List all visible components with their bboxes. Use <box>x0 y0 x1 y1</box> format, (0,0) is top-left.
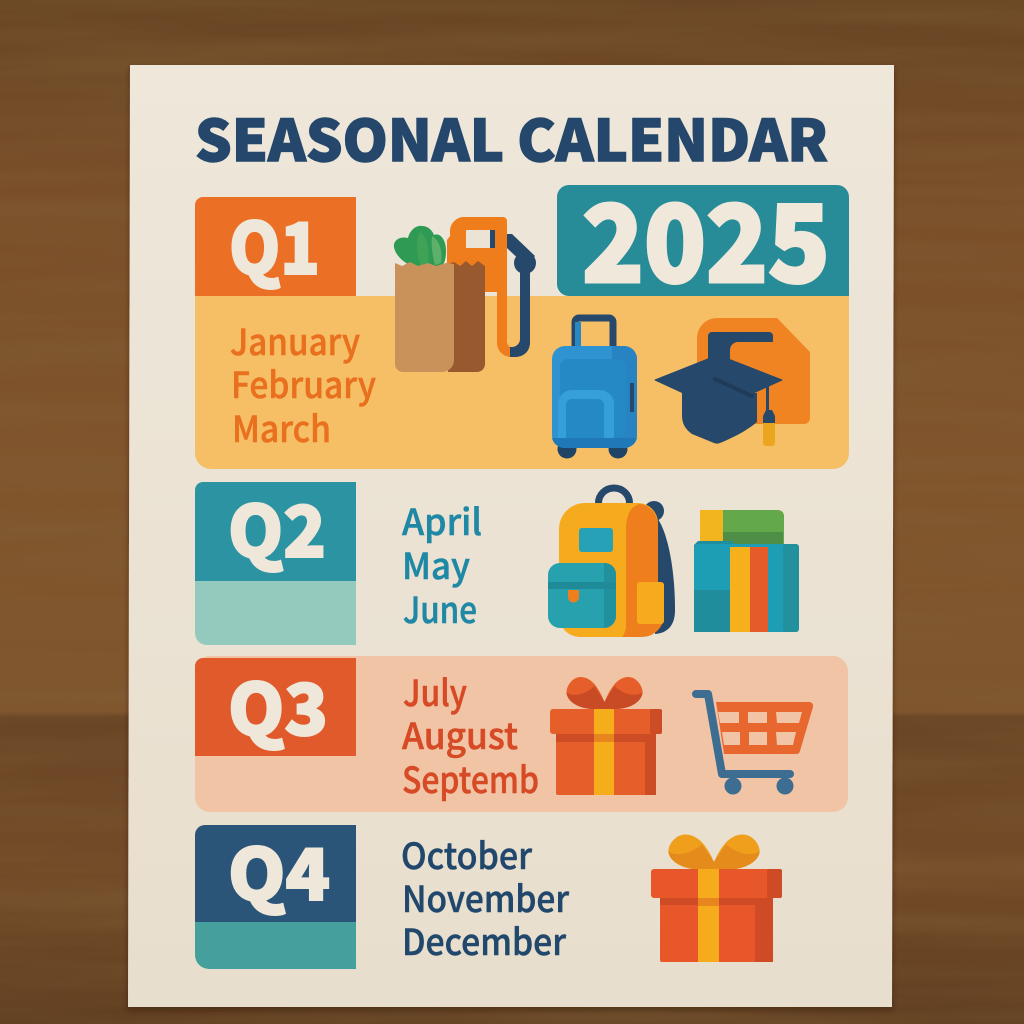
Q2 label box: Q2 <box>228 476 326 578</box>
Q1 yellow band <box>195 296 849 469</box>
icon: stacked books <box>694 510 799 632</box>
Q1 label box <box>195 193 356 296</box>
panel: Q1 <box>195 158 849 469</box>
icon: shopping cart <box>696 694 813 794</box>
icon: graduation cap with document <box>655 318 810 446</box>
Q2 months <box>402 494 482 634</box>
Q3 months: July <box>403 665 467 717</box>
title: SEASONAL CALENDAR <box>195 96 828 178</box>
panel: Q3 <box>195 654 848 812</box>
icon: fuel pump <box>447 217 536 357</box>
Q2 months: June <box>403 582 477 634</box>
icon: grocery bag <box>394 226 485 372</box>
Q2 months: April <box>402 494 482 546</box>
Q2 months: May <box>402 538 470 590</box>
Q4 months <box>401 828 569 966</box>
panel: Q2 <box>195 476 799 645</box>
Q4 months: December <box>402 914 566 966</box>
Q3 label box: Q3 <box>228 654 328 756</box>
Q1 months: March <box>232 401 331 453</box>
Q1 months <box>230 314 376 453</box>
Q2 label box <box>195 476 356 645</box>
year badge: 2025 <box>582 158 830 313</box>
icon: suitcase <box>552 318 637 458</box>
Q1 months: January <box>230 314 360 366</box>
icon: gift box <box>651 834 782 962</box>
Q3 band <box>195 656 848 812</box>
Q4 label box <box>195 819 356 969</box>
Q1 label box: Q1 <box>229 193 320 295</box>
Q3 label box <box>195 654 356 756</box>
icon: backpack <box>548 488 675 637</box>
Q1 months: February <box>231 357 376 409</box>
panel: Q4 <box>195 819 782 969</box>
Q4 months: November <box>402 871 569 923</box>
icon: gift box <box>550 677 662 795</box>
Q3 months <box>402 665 539 804</box>
Q3 months: August <box>402 708 518 760</box>
paper sheet <box>128 65 894 1007</box>
Q4 months: October <box>401 828 532 880</box>
Q3 months: Septemb <box>402 752 539 804</box>
Q4 label box: Q4 <box>228 819 330 921</box>
